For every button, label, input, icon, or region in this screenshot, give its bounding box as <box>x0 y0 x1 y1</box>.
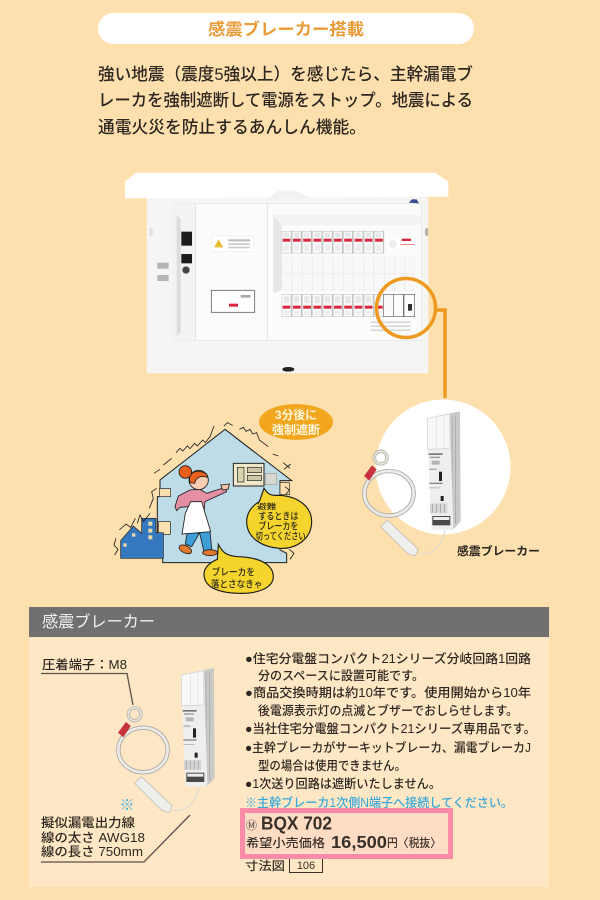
dimension reference <box>245 858 322 873</box>
intro text: レーカを強制遮断して電源をストップ。地震による <box>98 91 473 110</box>
callout: warning bubble: 切ってください <box>256 532 306 543</box>
orange callout ring and leader <box>376 278 445 398</box>
product photo: earthquake breaker <box>364 411 461 556</box>
callout: warning bubble: 避難 <box>257 502 277 511</box>
callout: warning bubble: するときは <box>258 512 299 523</box>
price box <box>242 810 450 856</box>
intro text: 通電火災を防止するあんしん機能。 <box>98 118 366 137</box>
panel header <box>29 607 549 637</box>
callout: breaker bubble: 落とさなきゃ <box>211 578 262 590</box>
callout: warning bubble <box>247 488 312 548</box>
panel: product details <box>29 607 549 887</box>
feature list: 後電源表示灯の点滅とブザーでおしらせします。 <box>258 703 518 718</box>
heading pill <box>98 13 474 44</box>
badge: forced cutoff after 3 minutes: 3分後に <box>275 407 317 422</box>
price box: Ⓜ <box>246 819 257 832</box>
icon: woman pointing <box>175 466 229 556</box>
callout: warning bubble: ブレーカを <box>258 521 298 533</box>
house illustration <box>114 423 312 593</box>
dimension reference: 寸法図 <box>245 858 285 873</box>
distribution board photo <box>125 173 448 373</box>
label: output wire specs: 線の長さ 750mm <box>41 844 143 859</box>
icon: blue buildings <box>121 518 163 558</box>
product caption: 感震ブレーカー <box>457 544 540 558</box>
feature list: 分のスペースに設置可能です。 <box>258 668 424 683</box>
feature list: ●1次送り回路は遮断いたしません。 <box>245 776 441 791</box>
callout: breaker bubble <box>204 544 273 593</box>
feature list: ●主幹ブレーカがサーキットブレーカ、漏電ブレーカJ <box>245 740 531 755</box>
feature list: ●住宅分電盤コンパクト21シリーズ分岐回路1回路 <box>245 651 531 666</box>
badge: forced cutoff after 3 minutes: 強制遮断 <box>272 422 320 437</box>
shaking lines <box>114 423 294 559</box>
price box: 円〈税抜〉 <box>387 835 441 850</box>
product photo: breaker with cable <box>118 668 215 813</box>
label: crimp terminal <box>41 657 133 705</box>
callout: breaker bubble: ブレーカを <box>212 566 255 578</box>
feature list <box>245 651 536 791</box>
white circle behind device <box>376 400 510 534</box>
label: crimp terminal: 圧着端子：M8 <box>42 657 127 672</box>
label: output wire specs <box>41 815 190 862</box>
label: output wire specs: 線の太さ AWG18 <box>41 830 145 845</box>
dimension reference: 106 <box>297 860 315 872</box>
feature list: 型の場合は使用できません。 <box>258 758 406 773</box>
badge: forced cutoff after 3 minutes <box>259 404 333 440</box>
icon: house <box>157 429 292 563</box>
panel header: 感震ブレーカー <box>42 612 155 631</box>
intro text <box>98 64 473 137</box>
heading pill: 感震ブレーカー搭載 <box>208 19 365 39</box>
icon: wall panel <box>233 463 264 486</box>
price box: BQX 702 <box>261 814 332 834</box>
intro text: 強い地震（震度5強以上）を感じたら、主幹漏電ブ <box>98 64 473 84</box>
label: output wire specs: 擬似漏電出力線 <box>41 815 136 830</box>
icon: blue asterisk mark: ※ <box>119 797 135 814</box>
blue note: ※主幹ブレーカ1次側N端子へ接続してください。 <box>245 795 513 810</box>
price box: 希望小売価格 <box>246 835 325 850</box>
feature list: ●商品交換時期は約10年です。使用開始から10年 <box>245 685 531 700</box>
feature list: ●当社住宅分電盤コンパクト21シリーズ専用品です。 <box>245 721 536 736</box>
price box: 16,500 <box>331 832 387 852</box>
